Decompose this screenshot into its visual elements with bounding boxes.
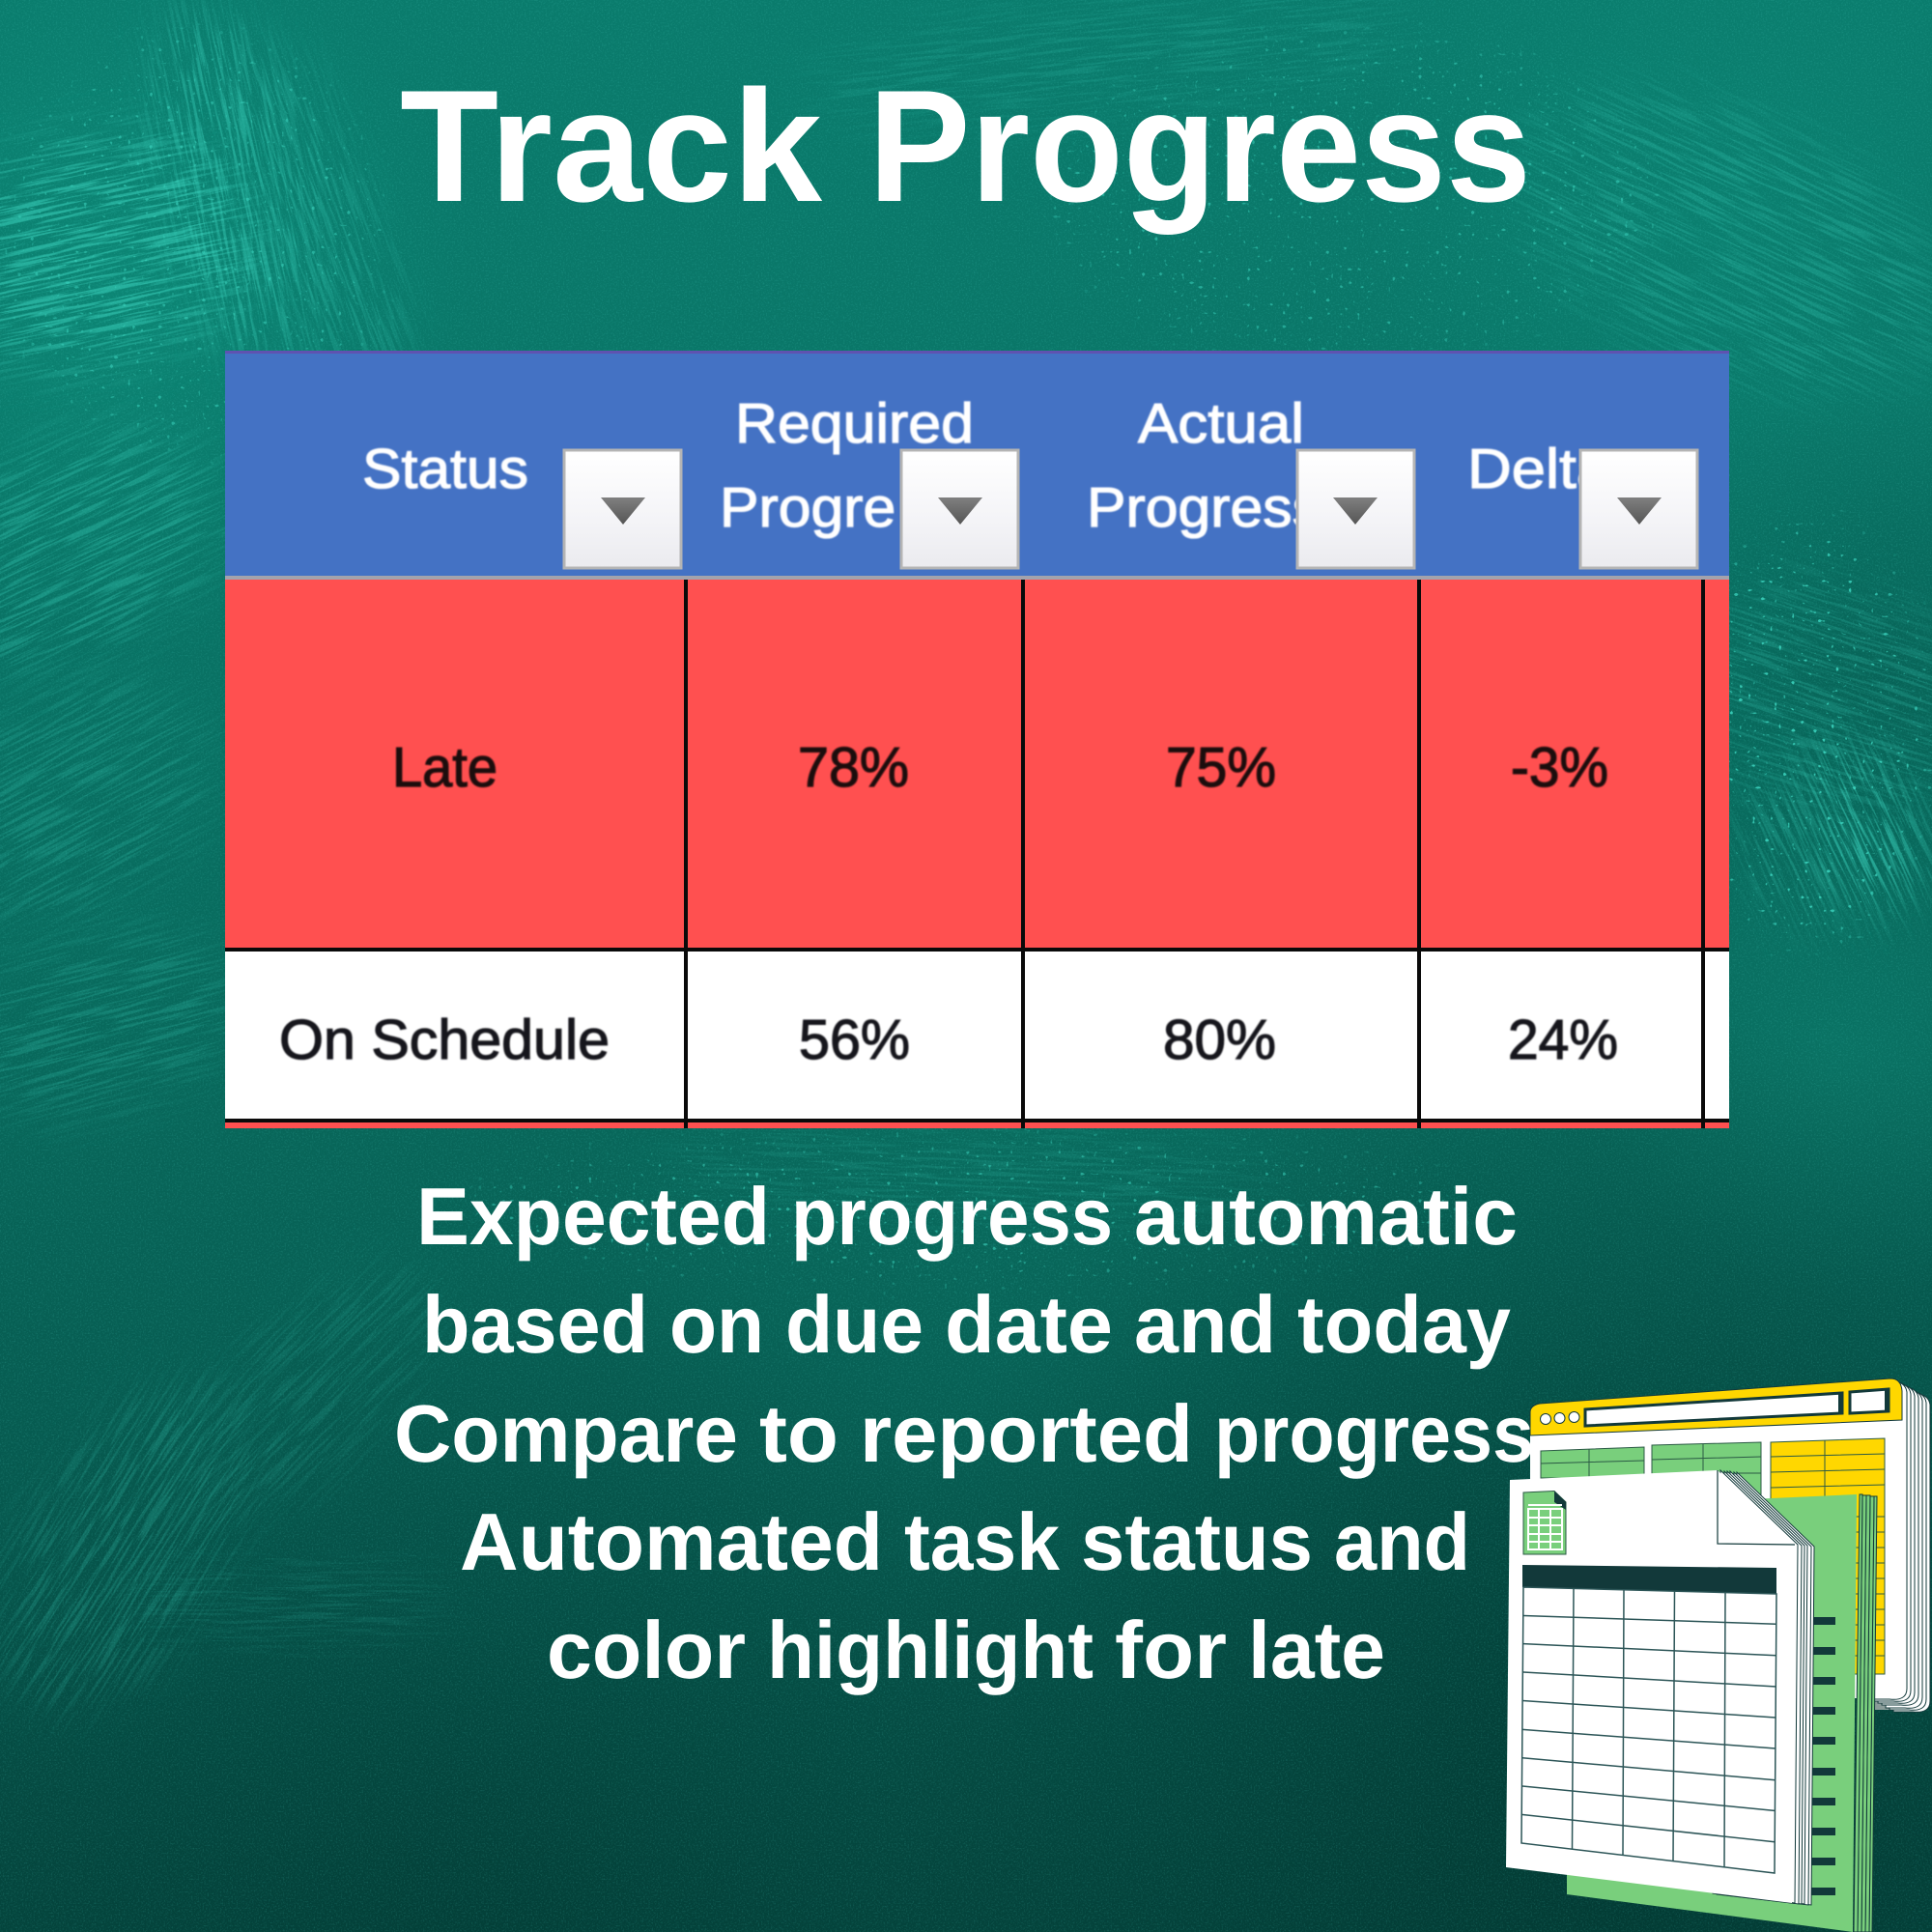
- dark table header bar: [1522, 1565, 1776, 1594]
- icon: yellow browser window spreadsheet: [1530, 1378, 1930, 1712]
- row values: late: Late: [392, 736, 497, 799]
- body text block: highlight: [767, 1605, 1094, 1695]
- column headings: Required: [735, 392, 974, 455]
- column headings: Progress: [1087, 476, 1321, 539]
- row values: on schedule: [279, 1009, 1618, 1071]
- body text block: to: [759, 1388, 838, 1479]
- row values: on schedule: On Schedule: [279, 1009, 610, 1071]
- body text block: task: [904, 1496, 1060, 1587]
- body text block: status: [1081, 1496, 1313, 1587]
- icon: spreadsheet documents: [1506, 1378, 1930, 1932]
- body text block: Expected: [416, 1171, 770, 1262]
- column headings: Progress: [720, 476, 954, 539]
- green notebook: [1567, 1494, 1877, 1932]
- row values: on schedule: 56%: [799, 1009, 910, 1071]
- row values: late: 75%: [1166, 736, 1276, 799]
- row values: late: -3%: [1511, 736, 1608, 799]
- body text block: progress: [1214, 1388, 1534, 1479]
- icon: small sheet file: [1523, 1492, 1566, 1554]
- body text block: reported: [860, 1388, 1193, 1479]
- row values: on schedule: 24%: [1508, 1009, 1618, 1071]
- body text block: due: [785, 1279, 923, 1370]
- column headings: Delta: [1467, 438, 1611, 500]
- title: [400, 57, 1531, 235]
- row values: on schedule: 80%: [1163, 1009, 1276, 1071]
- body text block: color: [547, 1605, 746, 1695]
- title: Progress: [868, 57, 1531, 235]
- body text block: and: [1134, 1279, 1276, 1370]
- table header band: [225, 351, 1729, 580]
- body text block: on: [669, 1279, 764, 1370]
- body text block: [394, 1171, 1534, 1695]
- column headings: [362, 392, 1611, 539]
- body text block: and: [1334, 1496, 1470, 1587]
- title: Track: [400, 57, 822, 235]
- table grid lines: [225, 580, 1729, 1128]
- body text block: late: [1248, 1605, 1385, 1695]
- column headings: Status: [362, 438, 528, 500]
- body text block: Compare: [394, 1388, 738, 1479]
- white on schedule row: [225, 952, 1729, 1119]
- filter dropdown buttons: [564, 450, 1697, 568]
- body text block: automatic: [1134, 1171, 1518, 1262]
- column headings: Actual: [1138, 392, 1304, 455]
- body text block: based: [422, 1279, 648, 1370]
- row values: late: 78%: [798, 736, 909, 799]
- body text block: date: [945, 1279, 1113, 1370]
- blank table grid: [1521, 1587, 1776, 1873]
- body text block: today: [1297, 1279, 1511, 1370]
- front document page stack: [1713, 1470, 1814, 1905]
- next red row sliver: [225, 1122, 1729, 1128]
- row values: late: [392, 736, 1608, 799]
- front document page: [1506, 1470, 1795, 1903]
- body text block: for: [1115, 1605, 1227, 1695]
- panel: status table screenshot: [225, 351, 1729, 1128]
- body text block: Automated: [460, 1496, 883, 1587]
- notebook binding ticks: [1811, 1617, 1835, 1895]
- body text block: progress: [791, 1171, 1113, 1262]
- red late row: [225, 580, 1729, 949]
- window mini tables: [1541, 1438, 1885, 1674]
